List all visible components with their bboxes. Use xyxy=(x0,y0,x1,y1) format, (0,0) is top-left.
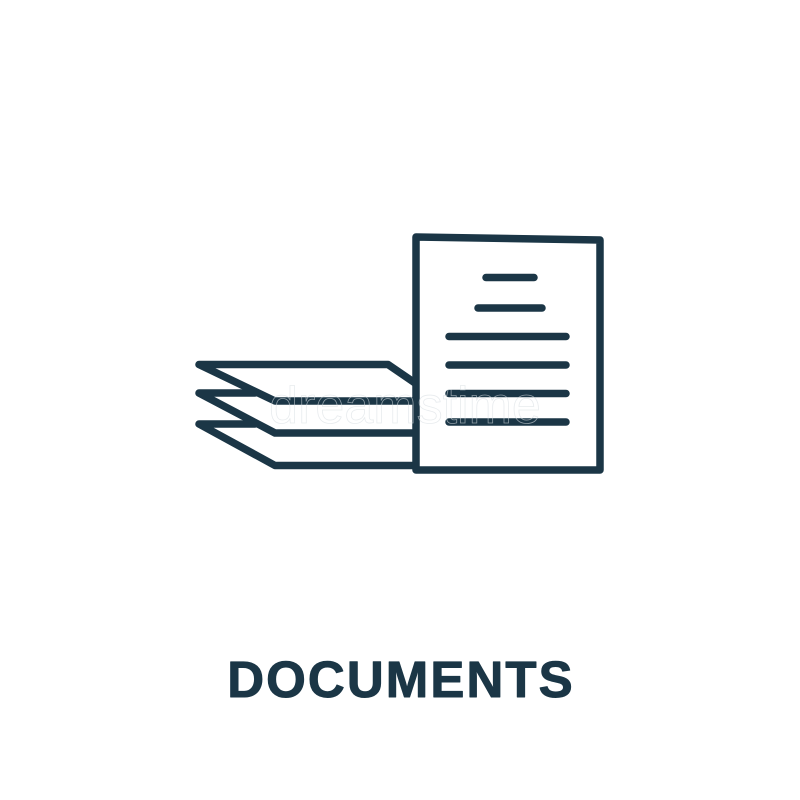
title: DOCUMENTS xyxy=(227,651,575,708)
icon: stack of papers xyxy=(199,364,415,466)
document text lines xyxy=(449,278,566,422)
icon: bottom sheet xyxy=(199,424,415,466)
icon: middle sheet xyxy=(199,393,415,433)
icon: upright document xyxy=(416,237,600,470)
watermark: dreamstime xyxy=(269,377,541,435)
icon: top sheet xyxy=(199,364,415,401)
document outline xyxy=(416,237,600,470)
